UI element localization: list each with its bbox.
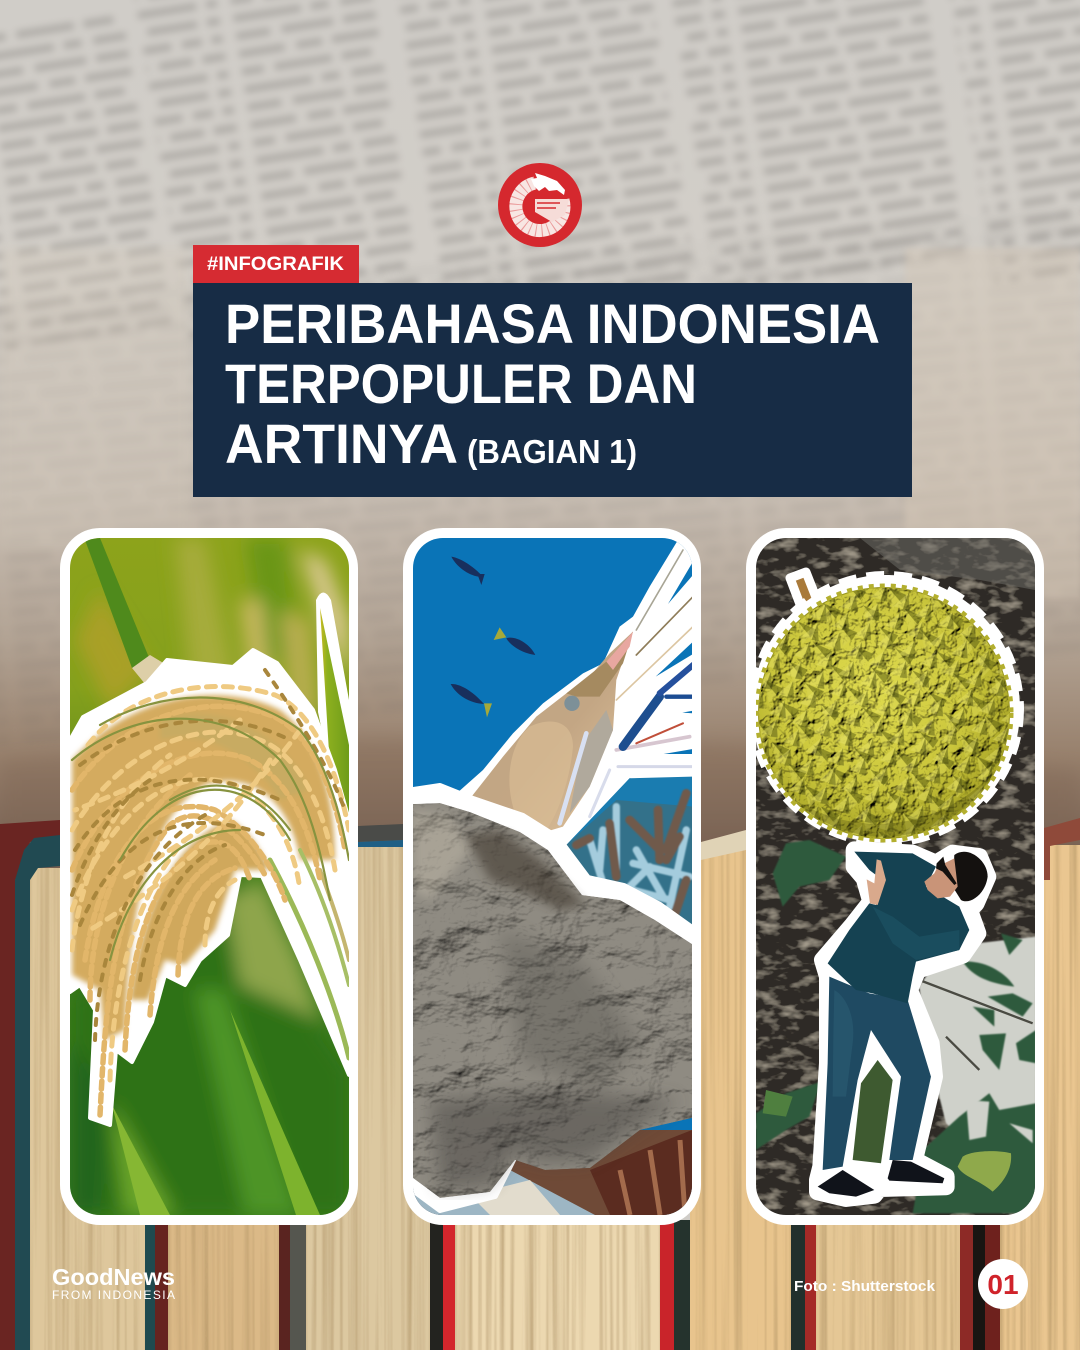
tag: #INFOGRAFIK: #INFOGRAFIK [207, 253, 344, 275]
background: blurred newspaper [0, 0, 1080, 880]
brand: GoodNews from Indonesia: GoodNews [52, 1264, 175, 1290]
jacket [828, 852, 969, 1003]
shoes [818, 1170, 874, 1197]
background: row of book page edges [0, 818, 1080, 1350]
rice white outline [70, 650, 349, 1125]
logo ring [516, 183, 564, 230]
hair [953, 852, 988, 901]
logo badge [498, 163, 582, 247]
gap between legs [853, 1060, 893, 1163]
title block: ARTINYA [225, 412, 458, 475]
coral [566, 777, 693, 933]
rice panicle grains [72, 670, 349, 1115]
blue streaks [656, 562, 693, 754]
face [924, 858, 958, 898]
durian stem [786, 568, 818, 605]
logo eagle head [531, 173, 565, 195]
tag: #INFOGRAFIK [193, 245, 359, 283]
panel: durian and man [746, 528, 1044, 1225]
rice gold mass [72, 695, 335, 1040]
man outline [818, 850, 988, 1198]
fish [451, 557, 535, 717]
panel: shrimp and rock [403, 528, 703, 1225]
photo credit: Foto : Shutterstock [794, 1278, 936, 1295]
rice right stems [270, 850, 349, 1058]
title block: TERPOPULER DAN [225, 352, 697, 415]
title block [193, 283, 912, 497]
shrimp [466, 550, 693, 832]
rice blurred stalk [85, 538, 150, 668]
title block: PERIBAHASA INDONESIA [225, 292, 880, 355]
hand [867, 859, 886, 905]
rock white outline [413, 786, 692, 1210]
bottom reef [413, 1130, 692, 1215]
rice leaf [316, 592, 349, 748]
jeans [823, 977, 931, 1170]
logo centre [535, 199, 569, 222]
page number [978, 1259, 1028, 1309]
brand: GoodNews from Indonesia: FROM INDONESIA [52, 1288, 175, 1302]
rock body [413, 803, 692, 1198]
title block: (BAGIAN 1) [467, 433, 637, 470]
panel: rice [60, 528, 358, 1225]
durian [751, 574, 1021, 844]
page number: 01 [987, 1269, 1019, 1300]
white sky through leaves [919, 936, 1035, 1126]
shrimp white outline [453, 540, 703, 847]
brand: GoodNews from Indonesia [52, 1264, 175, 1302]
background leaves [756, 840, 1036, 1213]
